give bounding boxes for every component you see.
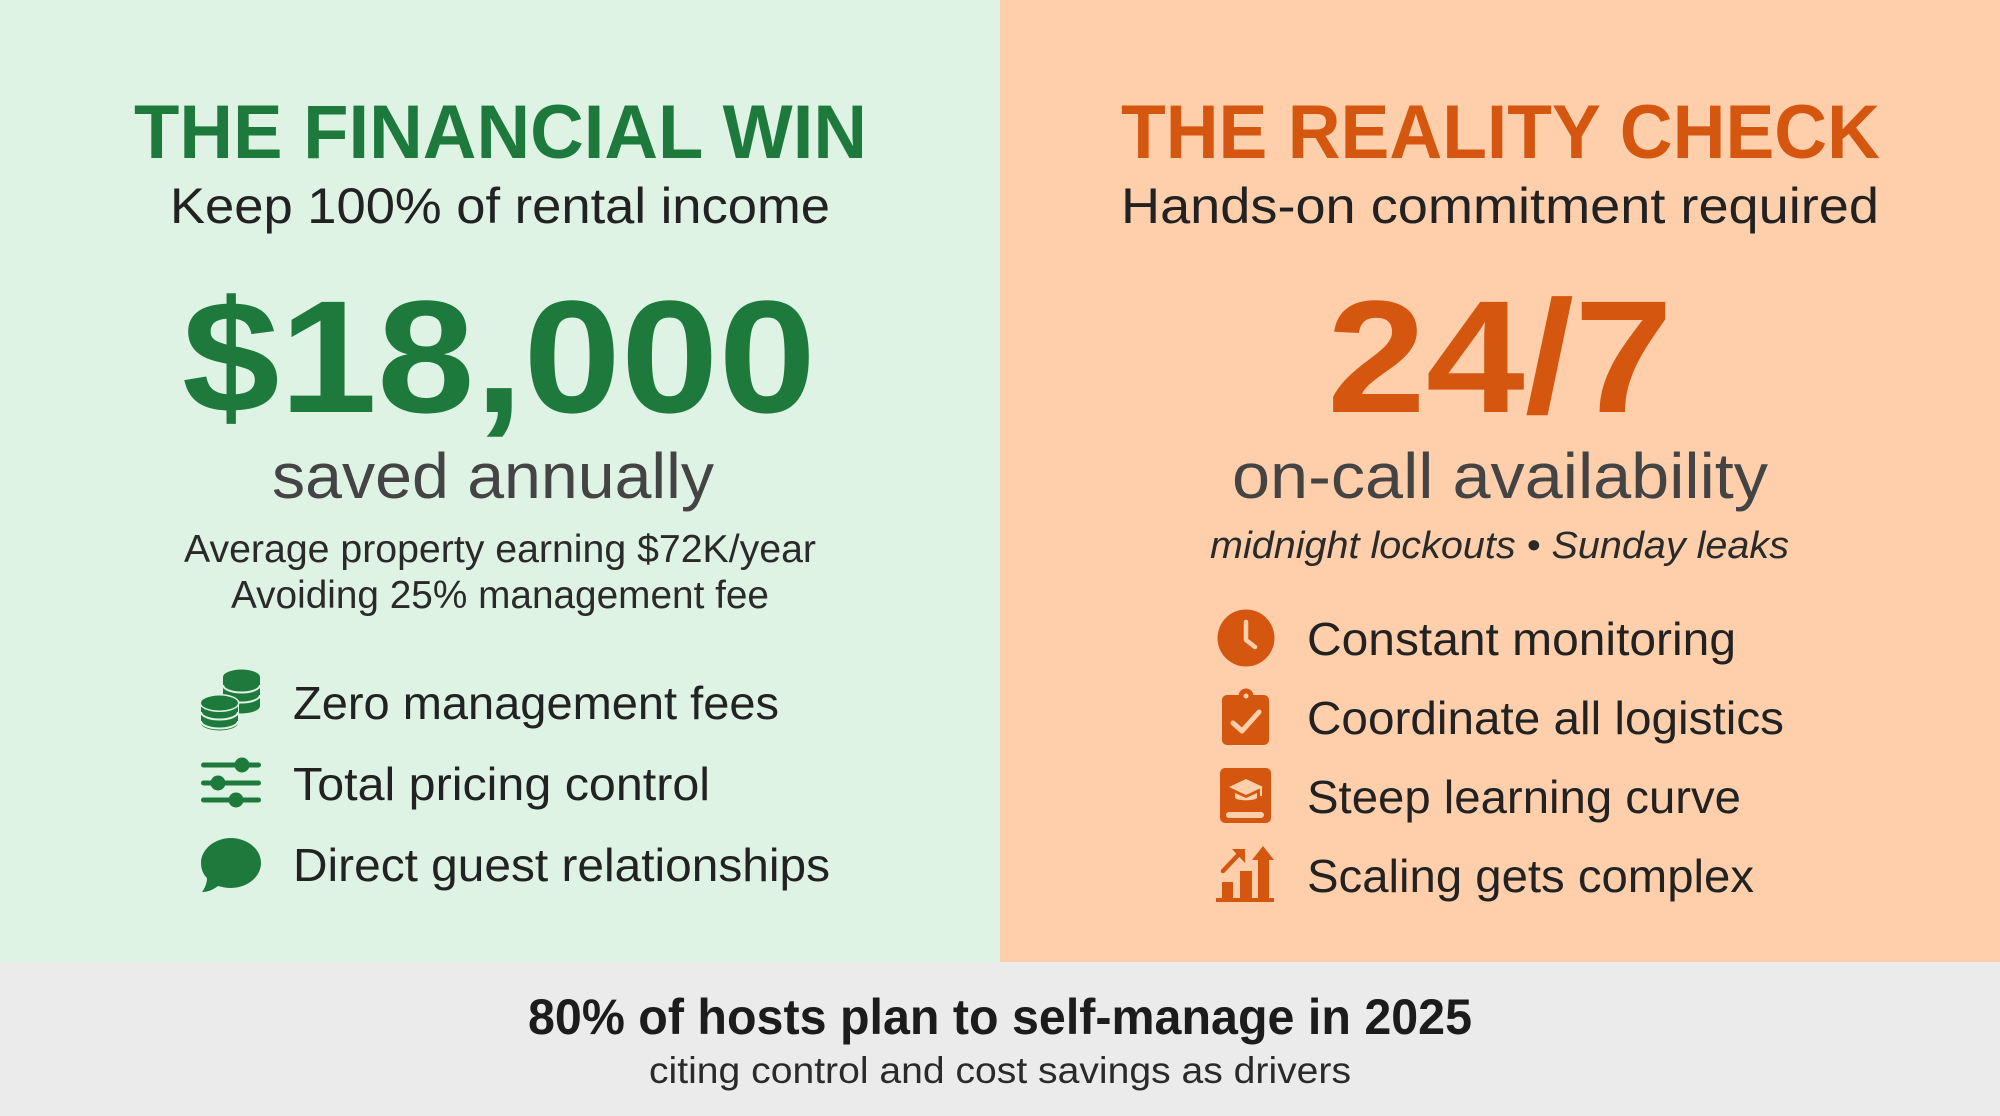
detail: midnight lockouts: midnight lockouts • Sunday leaks xyxy=(1210,525,1789,567)
footer headline: 80% of hosts plan to self-manage in 2025 xyxy=(528,989,1472,1045)
list item: steep learning curve: Steep learning curve xyxy=(1307,771,1741,823)
detail: average property: Average property earning $72K/year xyxy=(184,528,816,571)
panel: the financial win xyxy=(0,0,1000,962)
list item: constant monitoring: Constant monitoring xyxy=(1307,613,1736,665)
panel: the reality check xyxy=(1000,0,2000,962)
icon: book with graduation cap xyxy=(1220,768,1271,823)
heading: the financial win: THE FINANCIAL WIN xyxy=(134,90,867,175)
big number: 24/7: 24/7 xyxy=(1327,267,1673,446)
icon: growth chart xyxy=(1216,846,1274,902)
icon: clipboard check xyxy=(1222,688,1269,745)
footer subtext: citing control and cost savings as drivers xyxy=(649,1050,1351,1091)
heading: the reality check: THE REALITY CHECK xyxy=(1121,90,1880,175)
list item: scaling gets complex: Scaling gets complex xyxy=(1307,850,1754,902)
label: on-call availability: on-call availability xyxy=(1232,440,1768,512)
subheading: hands-on commitment: Hands-on commitment required xyxy=(1121,178,1879,234)
list item: coordinate all logistics: Coordinate all logistics xyxy=(1307,692,1784,744)
icon: sliders xyxy=(201,758,261,808)
list item: zero management fees: Zero management fees xyxy=(293,677,779,729)
icon: clock xyxy=(1218,610,1274,666)
list item: total pricing control: Total pricing control xyxy=(293,758,710,810)
detail: management fee: Avoiding 25% management fee xyxy=(231,574,769,617)
subheading: keep rental income: Keep 100% of rental income xyxy=(170,178,830,234)
big number: savings: $18,000 xyxy=(182,267,816,446)
icon: coins xyxy=(199,670,260,732)
label: saved annually: saved annually xyxy=(272,440,714,512)
icon: speech bubble xyxy=(201,838,261,892)
list item: direct guest relationships: Direct guest relationships xyxy=(293,839,830,891)
footer banner xyxy=(0,962,2000,1116)
